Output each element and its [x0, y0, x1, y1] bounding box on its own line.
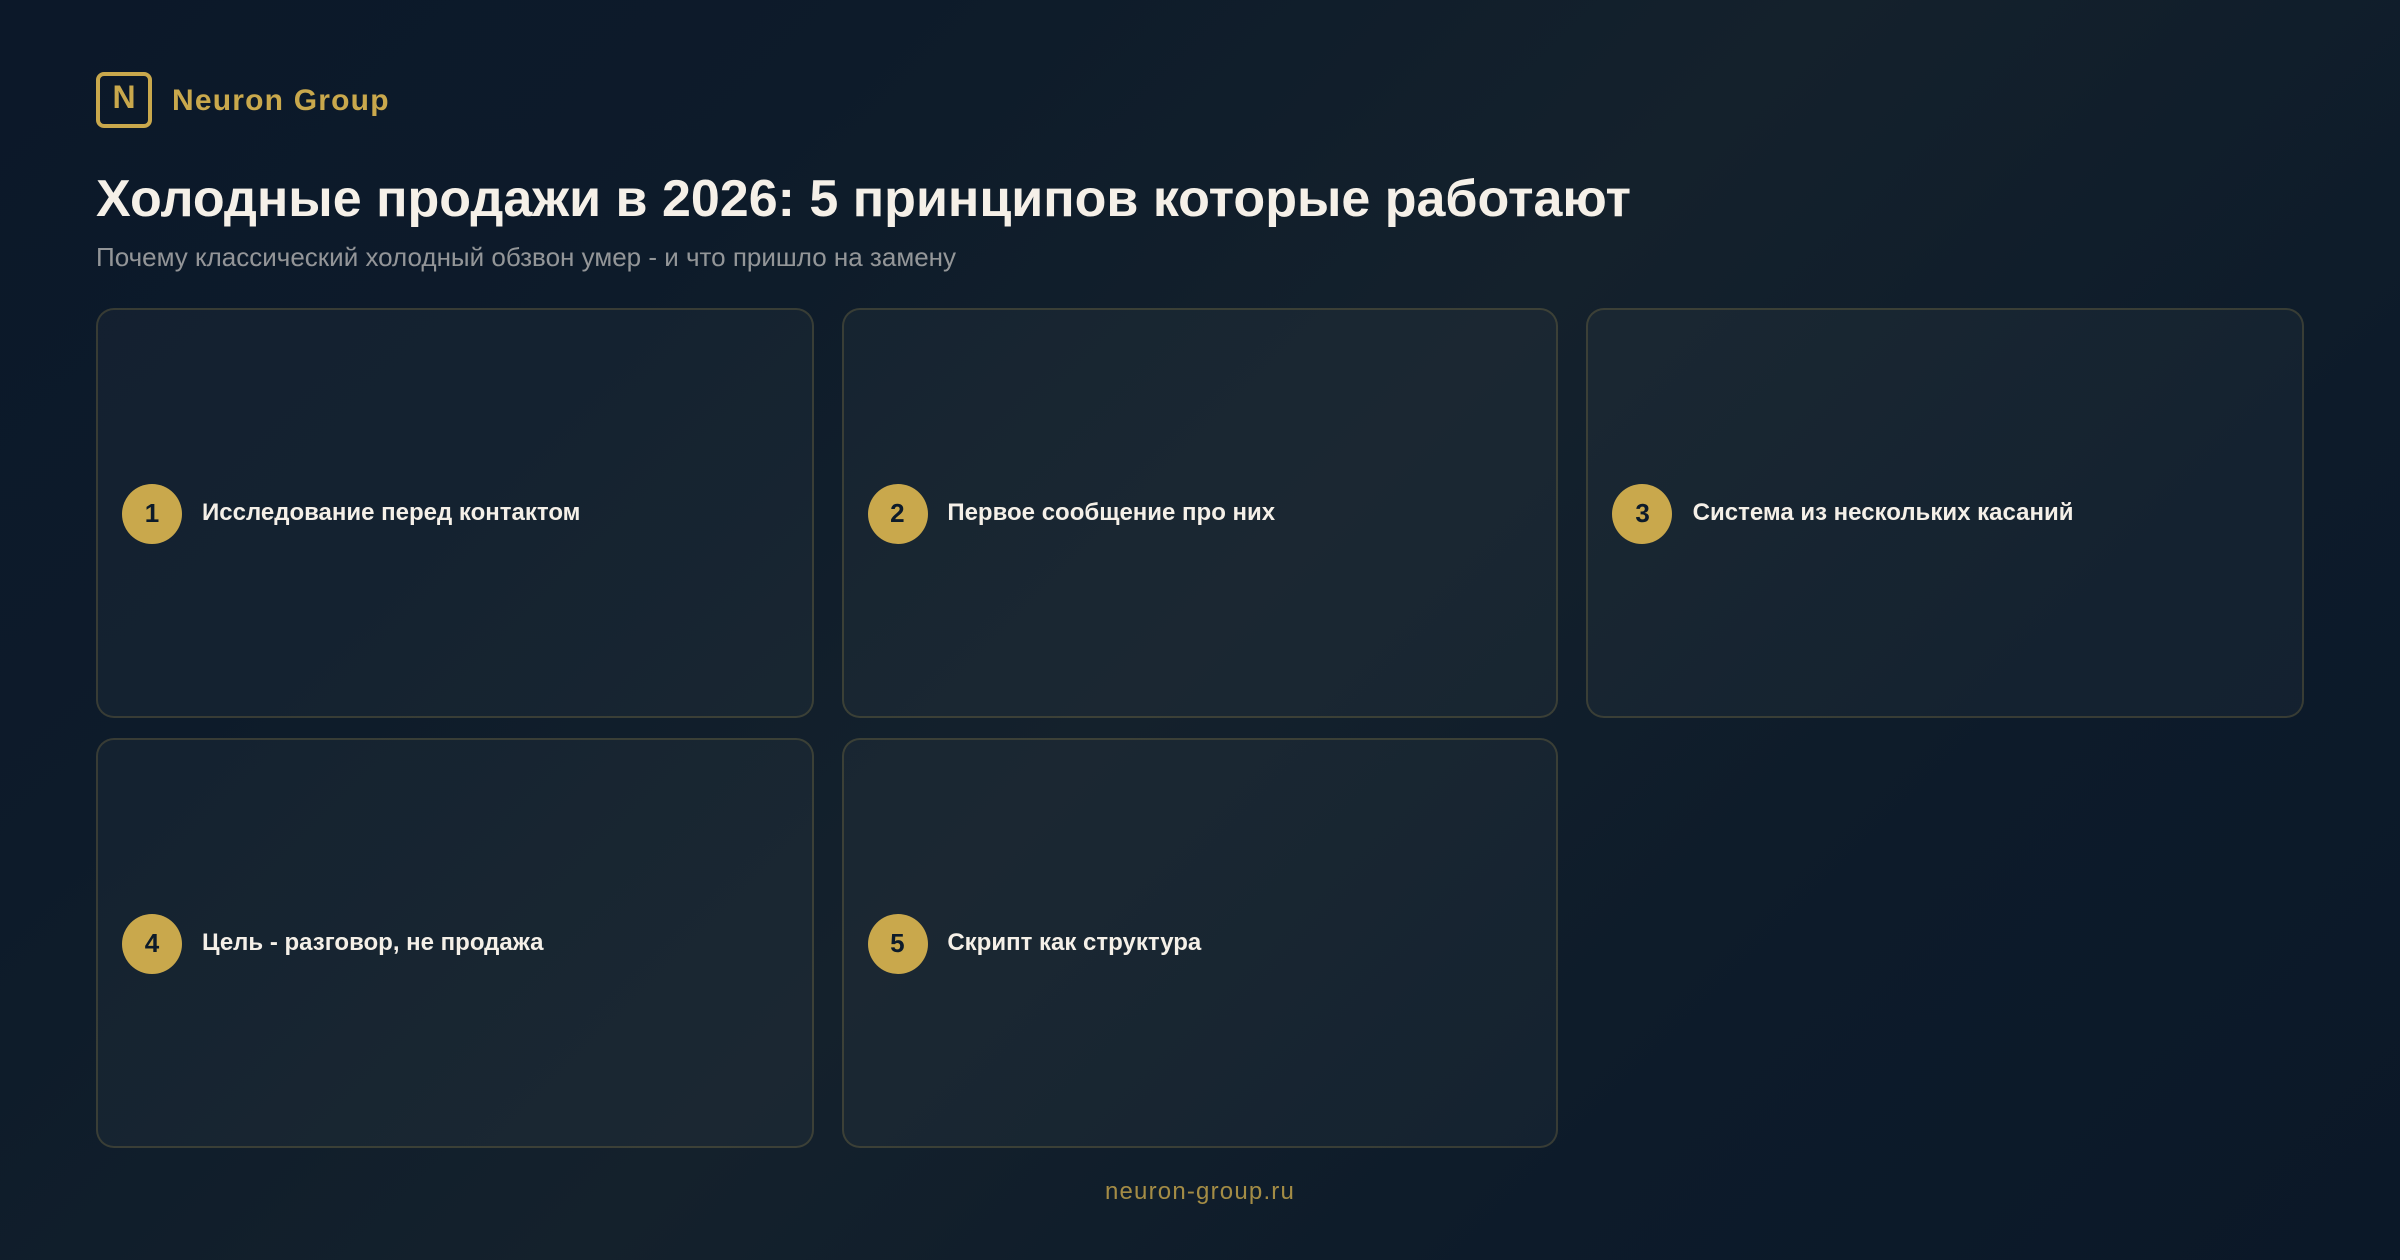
footer url: neuron-group.ru: [1105, 1178, 1295, 1204]
number badge 3: 3: [1635, 498, 1650, 528]
number badge 2: [868, 484, 928, 544]
number badge 3: [1612, 484, 1672, 544]
card 5 heading: Скрипт как структура: [947, 929, 1201, 956]
card 3 heading: Система из нескольких касаний: [1693, 499, 2073, 526]
panel: card 4: [96, 738, 814, 1148]
card 4 heading: Цель - разговор, не продажа: [202, 929, 543, 956]
number badge 1: [122, 484, 182, 544]
number badge 2: 2: [890, 498, 905, 528]
number badge 1: 1: [145, 498, 159, 528]
brand name: Neuron Group: [172, 84, 390, 117]
logo mark: N: [112, 79, 136, 115]
number badge 5: 5: [890, 928, 905, 958]
number badge 4: 4: [145, 928, 159, 958]
panel: card 2: [842, 308, 1558, 718]
panel: card 3: [1586, 308, 2304, 718]
title: Холодные продажи в 2026: 5 принципов которые работают: [96, 170, 1631, 228]
card 1 heading: Исследование перед контактом: [202, 499, 580, 526]
panel: card 1: [96, 308, 814, 718]
number badge 4: [122, 914, 182, 974]
number badge 5: [868, 914, 928, 974]
logo mark: [96, 72, 152, 128]
subtitle: Почему классический холодный обзвон умер - и что пришло на замену: [96, 242, 956, 272]
panel: card 5: [842, 738, 1558, 1148]
card 2 heading: Первое сообщение про них: [947, 499, 1275, 526]
